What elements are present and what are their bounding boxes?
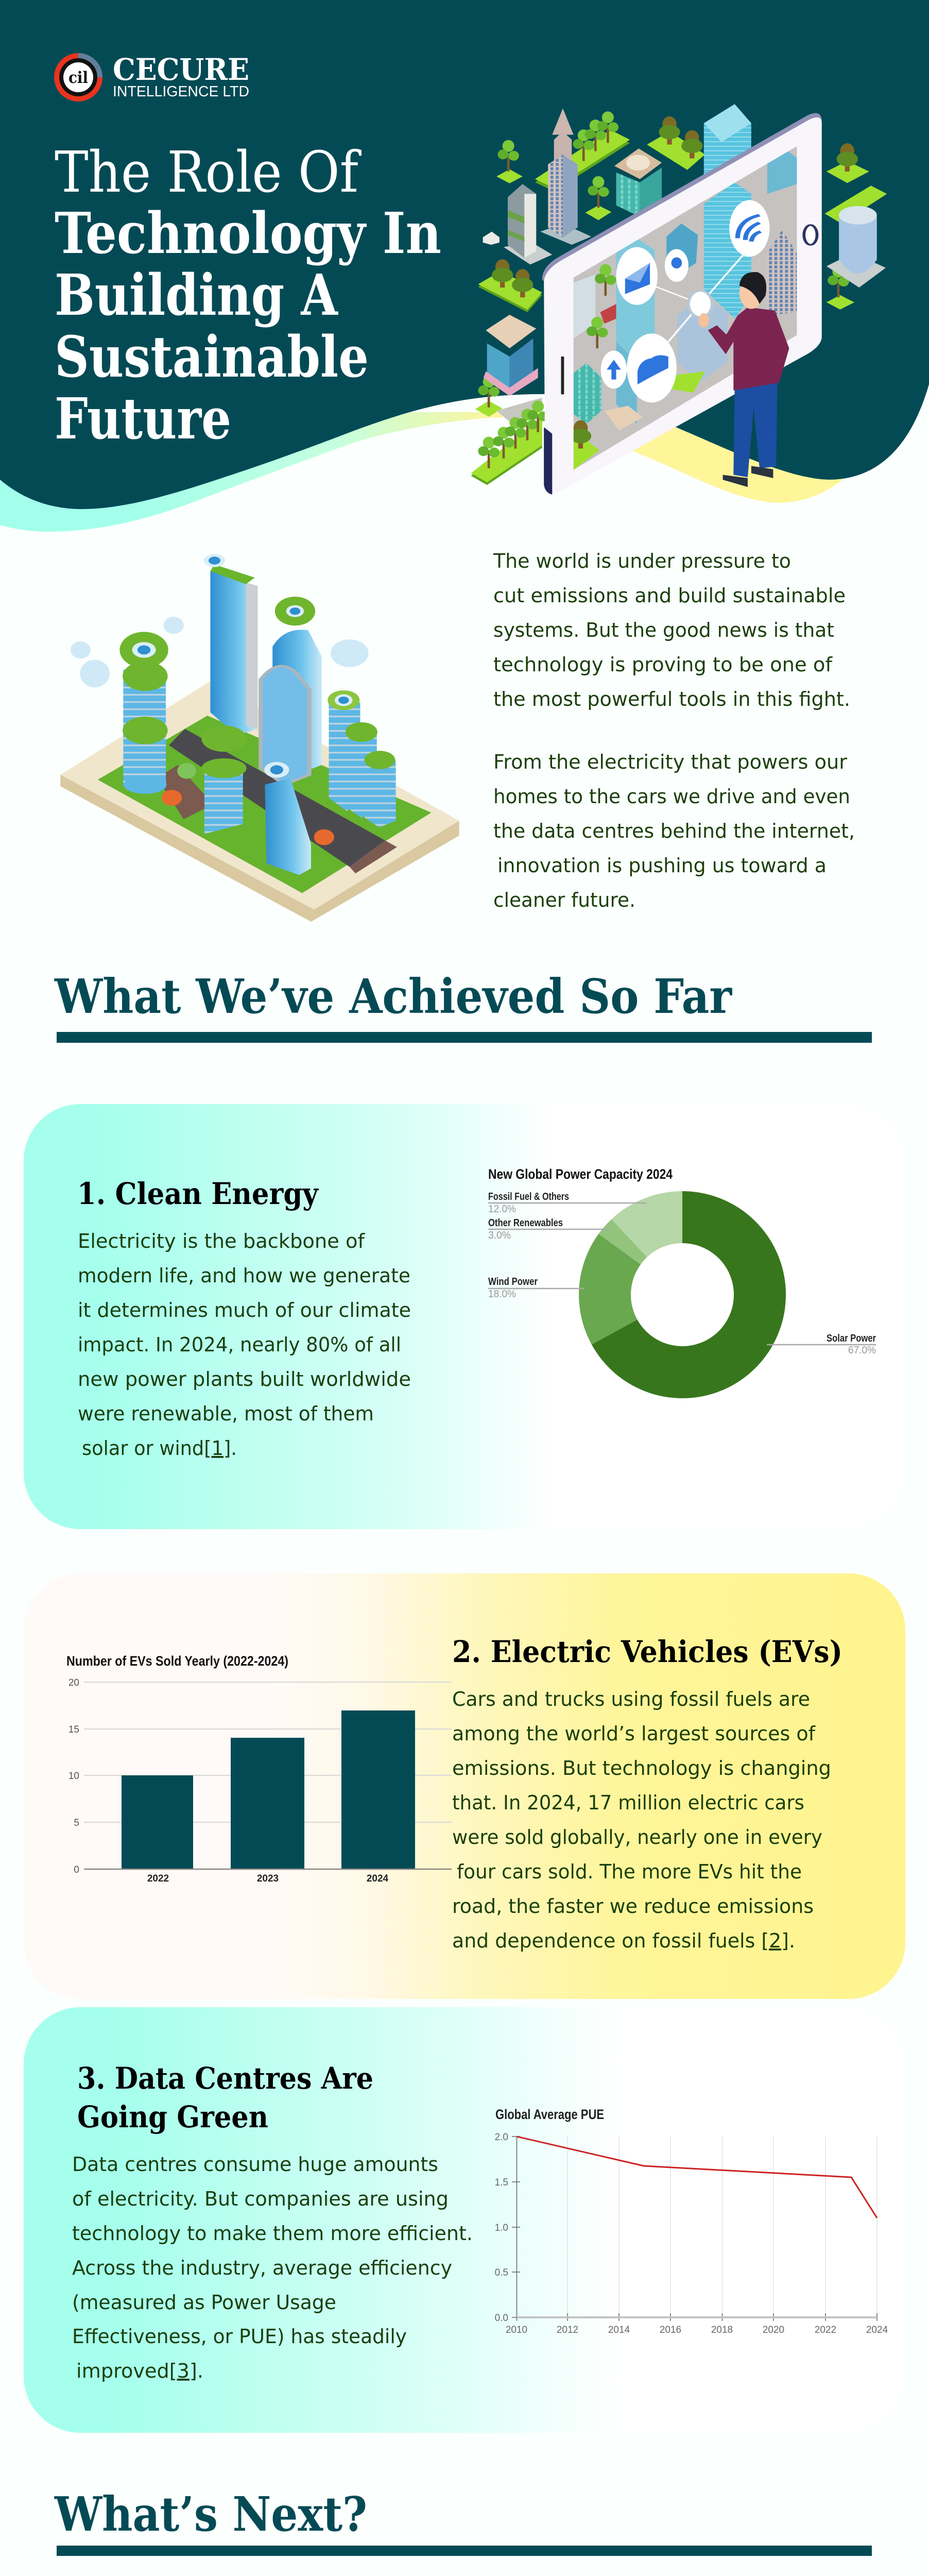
line chart: 2.0 [495,2132,508,2143]
body text: and dependence on fossil fuels [2]. [452,1929,795,1952]
body text: emissions. But technology is changing [452,1757,831,1780]
trees [478,111,858,468]
tall centre tower [201,554,257,834]
body text: Electricity is the backbone of [78,1230,366,1252]
body text: improved[3]. [76,2360,203,2382]
heading: what's next: What’s Next? [54,2486,367,2542]
intro text: systems. But the good news is that [493,619,834,641]
line chart: 2024 [866,2325,888,2335]
body text: Across the industry, average efficiency [72,2257,452,2279]
gradient wave [0,412,845,532]
title: Sustainable [55,324,369,390]
body text: that. In 2024, 17 million electric cars [452,1791,804,1814]
intro text: cleaner future. [493,889,635,911]
panel: clean energy [24,1104,905,1529]
bar chart: 20 [68,1677,79,1688]
heading: 3. Data Centres Are [77,2061,373,2096]
illustration: green city on a phone [60,554,459,922]
title: Future [55,385,231,452]
donut chart: 12.0% [488,1204,516,1215]
line chart: 2012 [557,2325,578,2335]
body text: new power plants built worldwide [78,1368,411,1391]
line chart: 2018 [711,2325,733,2335]
donut chart: 3.0% [488,1230,511,1241]
line chart: 2020 [763,2325,784,2335]
bar chart: 5 [74,1818,79,1828]
body text: (measured as Power Usage [72,2291,336,2314]
tablet [542,113,822,495]
title: The Role Of [55,139,362,205]
pink rooftop building [484,315,538,396]
donut chart: 67.0% [848,1345,876,1356]
line chart: 0.5 [495,2267,508,2278]
phone platform [60,681,459,922]
donut chart: Fossil Fuel & Others [488,1191,569,1202]
donut chart: Wind Power [488,1276,538,1287]
logo: cil [68,69,88,87]
body text: solar or wind[1]. [82,1437,237,1460]
title: Building A [55,262,338,328]
tablet screen city [570,151,797,470]
front arch tower [264,762,311,875]
heading: 2. Electric Vehicles (EVs) [452,1634,842,1669]
bar chart: 2024 [367,1873,389,1884]
clouds [71,617,369,687]
body text: of electricity. But companies are using [72,2188,449,2210]
intro text [493,550,855,911]
logo [54,52,249,101]
title [55,139,441,452]
body text: were renewable, most of them [78,1402,374,1425]
title: Technology In [55,200,441,266]
body text [452,1688,831,1952]
line chart: 2014 [608,2325,630,2335]
donut chart: 18.0% [488,1289,516,1300]
body text: were sold globally, nearly one in every [452,1826,822,1849]
blue cylinder tower [827,206,886,287]
panel: electric vehicles [24,1573,905,1999]
body text: road, the faster we reduce emissions [452,1895,814,1918]
line chart: Global Average PUE [495,2107,604,2122]
left stacked tower [119,632,168,794]
intro text: innovation is pushing us toward a [497,854,827,877]
intro text: homes to the cars we drive and even [493,785,850,808]
line chart: 2022 [815,2325,836,2335]
panel: data centres [24,2007,905,2433]
line chart: 1.0 [495,2223,508,2233]
grey balcony tower [504,184,552,264]
intro text: the most powerful tools in this fight. [493,688,850,710]
bar chart: 0 [74,1865,79,1875]
intro text: the data centres behind the internet, [493,820,855,842]
body text [78,1230,411,1460]
cars [162,763,334,845]
heading: what's next [54,2486,872,2556]
logo: CECURE [113,52,249,87]
line chart: 0.0 [495,2313,508,2324]
bar chart: 10 [68,1771,79,1782]
donut chart: New Global Power Capacity 2024 [488,1166,673,1182]
body text [72,2153,473,2382]
green tiles [471,130,887,485]
clock tower [540,108,591,245]
body text: impact. In 2024, nearly 80% of all [78,1333,401,1356]
heading: what we've achieved: What We’ve Achieved So Far [54,969,732,1024]
body text: among the world’s largest sources of [452,1722,816,1745]
body text: Cars and trucks using fossil fuels are [452,1688,810,1710]
donut chart: Other Renewables [488,1217,563,1229]
body text: it determines much of our climate [78,1299,411,1321]
body text: technology to make them more efficient. [72,2222,473,2245]
intro text: From the electricity that powers our [493,751,847,773]
illustration: smart city on tablet [471,104,887,495]
bar chart [66,1653,452,1884]
body text: four cars sold. The more EVs hit the [457,1860,802,1883]
bar chart: Number of EVs Sold Yearly (2022-2024) [66,1653,288,1669]
heading: 1. Clean Energy [77,1176,319,1211]
dark wave background [0,0,929,509]
heading [77,2061,373,2134]
logo: INTELLIGENCE LTD [113,83,249,100]
donut chart [488,1166,876,1398]
heading: Going Green [77,2099,268,2134]
donut chart: Solar Power [827,1333,876,1344]
line chart: 2016 [660,2325,681,2335]
connection lines and app bubbles [601,200,769,402]
right cylinders [328,690,396,827]
person [698,272,789,487]
bar chart: 2023 [257,1873,279,1884]
teal helipad building [614,148,662,217]
arched towers [261,597,322,785]
body text: Data centres consume huge amounts [72,2153,438,2176]
cyan skyscraper [704,104,751,319]
bar chart: 2022 [147,1873,169,1884]
intro text: cut emissions and build sustainable [493,584,846,607]
body text: modern life, and how we generate [78,1264,410,1287]
bar chart: 15 [68,1724,79,1735]
intro text: technology is proving to be one of [493,653,833,676]
body text: Effectiveness, or PUE) has steadily [72,2325,407,2348]
line chart: 1.5 [495,2177,508,2188]
heading: what we've achieved [54,969,872,1043]
hero banner [0,0,929,532]
line chart [495,2107,888,2335]
intro text: The world is under pressure to [493,550,791,572]
line chart: 2010 [506,2325,527,2335]
